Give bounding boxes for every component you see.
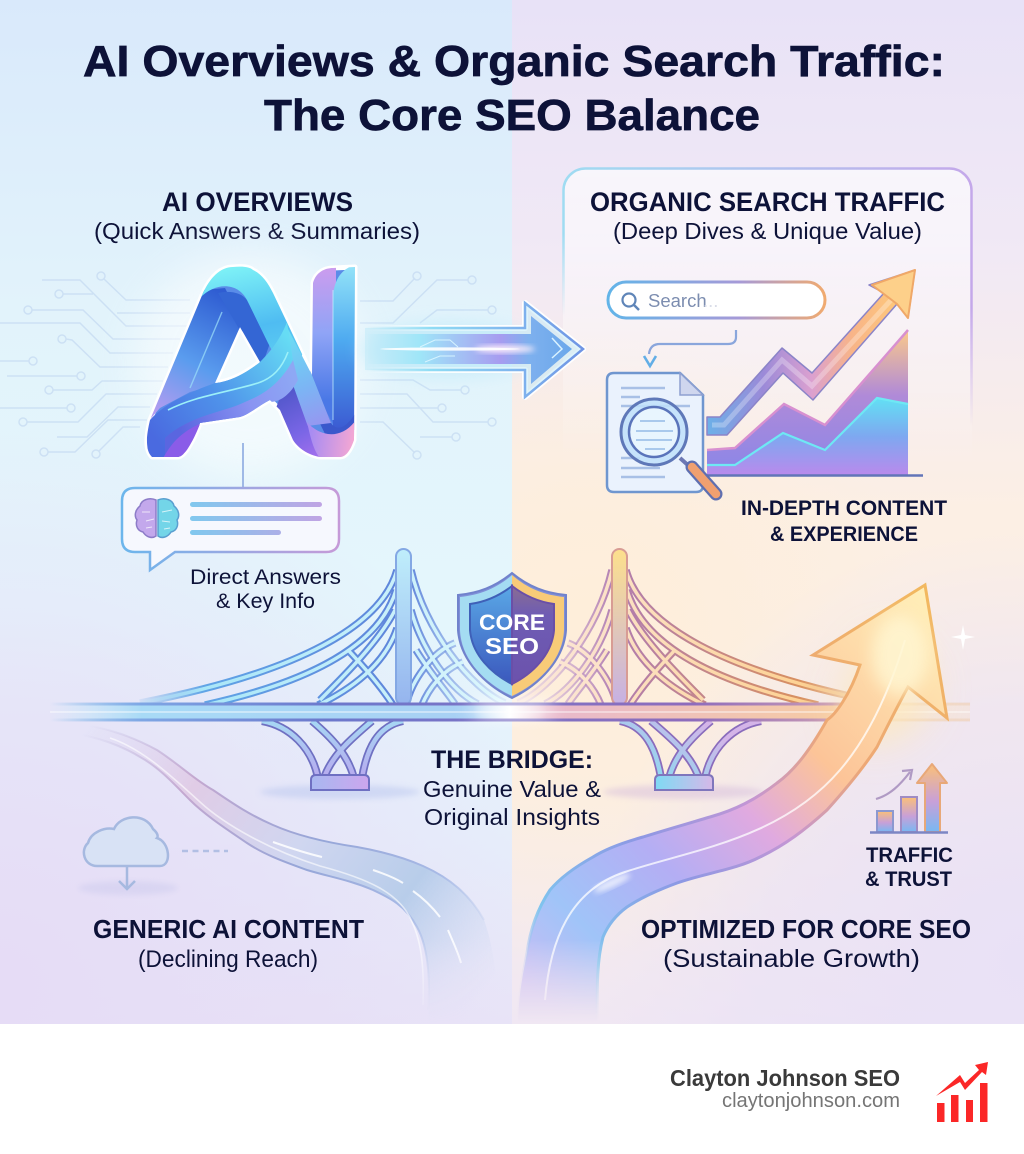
- circuit lines around AI logo: [0, 272, 496, 459]
- bridge: [50, 549, 970, 799]
- text: optimized for core SEO: [641, 914, 971, 973]
- text: the bridge: Original Insights: [424, 804, 600, 830]
- icon: mini growth chart: [870, 764, 948, 832]
- right band: [287, 327, 331, 426]
- text: the bridge: THE BRIDGE:: [431, 746, 593, 774]
- text: traffic and trust: & TRUST: [865, 868, 952, 891]
- text: optimized for core SEO: (Sustainable Growth): [663, 945, 920, 973]
- connector line: [242, 443, 244, 487]
- shield: core SEO: SEO: [485, 633, 539, 659]
- foot purple: [164, 424, 200, 457]
- heading: organic search traffic: (Deep Dives & Unique Value): [613, 218, 922, 244]
- cables right: [518, 570, 883, 705]
- text: optimized for core SEO: OPTIMIZED FOR CORE SEO: [641, 914, 971, 944]
- answer lines: [190, 502, 322, 535]
- text: generic AI content: [93, 914, 364, 973]
- pylon glow shadows: [260, 785, 420, 799]
- text: direct answers: & Key Info: [216, 589, 315, 613]
- chart: traffic growth: [700, 270, 923, 476]
- text: direct answers: Direct Answers: [190, 565, 341, 589]
- shield: core SEO: [458, 573, 566, 698]
- N vertical right: [333, 267, 355, 430]
- middle area: [707, 330, 908, 475]
- text: in-depth content: IN-DEPTH CONTENT: [741, 497, 947, 520]
- panel: organic search traffic: [562, 167, 973, 412]
- text: the bridge: Genuine Value &: [423, 776, 601, 802]
- search bar: ...: [703, 290, 718, 311]
- N inner fold: [312, 375, 354, 435]
- text: traffic and trust: TRAFFIC: [866, 844, 953, 867]
- title: [83, 37, 945, 140]
- text: traffic and trust: [865, 844, 953, 891]
- deck: [50, 703, 970, 721]
- shield: core SEO: CORE: [479, 610, 545, 635]
- arches: [262, 721, 761, 778]
- left leg: [150, 288, 242, 418]
- growth arrow ribbon: [707, 270, 915, 435]
- arrow: growth: [518, 585, 947, 1024]
- text: generic AI content: GENERIC AI CONTENT: [93, 914, 364, 944]
- pink foot: [307, 422, 354, 457]
- swoosh lower band: [165, 360, 298, 460]
- icon: cloud with down arrow: [78, 817, 228, 895]
- road: generic AI content: [97, 729, 488, 992]
- tower right: [612, 549, 627, 705]
- heading: AI Overviews: AI OVERVIEWS: [162, 187, 353, 217]
- search bar: [608, 282, 825, 318]
- text: generic AI content: (Declining Reach): [138, 946, 318, 973]
- icon: document with magnifier: [607, 373, 716, 494]
- tower left: [396, 549, 411, 705]
- icon: AI logo: [145, 264, 358, 460]
- inner dark fold: [218, 292, 270, 366]
- text: the bridge: [423, 746, 601, 830]
- highlights: [168, 352, 288, 410]
- search bar: Search: [648, 290, 707, 311]
- heading: AI Overviews: [94, 187, 420, 244]
- heading: organic search traffic: [590, 187, 945, 244]
- pedestals: [311, 775, 369, 790]
- background left: [0, 0, 512, 1024]
- lower purple: [276, 387, 320, 457]
- callout: direct answers bubble: [122, 488, 339, 570]
- icon: sparkle: [951, 625, 975, 650]
- title: The Core SEO Balance: [264, 91, 760, 140]
- background right: [512, 0, 1024, 1024]
- text: in-depth content: [741, 497, 947, 546]
- heading: AI Overviews: (Quick Answers & Summaries): [94, 218, 420, 244]
- heading: organic search traffic: ORGANIC SEARCH TRAFFIC: [590, 187, 945, 217]
- footer brand text: Clayton Johnson SEO: [670, 1065, 900, 1091]
- text: in-depth content: & EXPERIENCE: [770, 523, 918, 546]
- icon: footer logo: [936, 1062, 988, 1122]
- front area: [707, 398, 908, 475]
- glow behind AI logo: [135, 255, 365, 475]
- cables left: [140, 570, 505, 705]
- arrow: AI overviews to organic: [360, 303, 583, 397]
- footer brand text: claytonjohnson.com: [722, 1090, 900, 1112]
- icon: brain: [135, 499, 179, 537]
- swoosh: [146, 322, 296, 460]
- top band: [202, 266, 302, 356]
- arrow: search to document: [644, 330, 736, 366]
- footer band: [0, 1024, 1024, 1154]
- N vertical left: [310, 264, 336, 430]
- footer brand text: [670, 1065, 900, 1112]
- text: direct answers: [190, 565, 341, 613]
- title: AI Overviews & Organic Search Traffic:: [83, 37, 945, 86]
